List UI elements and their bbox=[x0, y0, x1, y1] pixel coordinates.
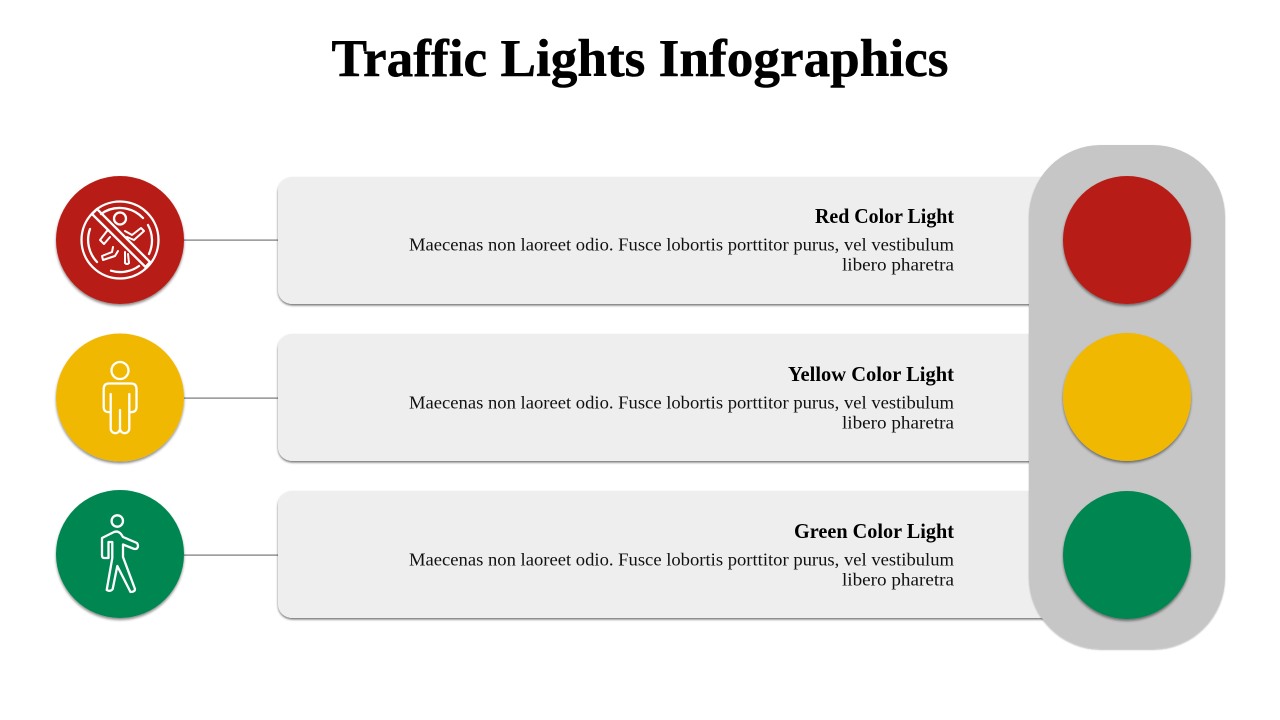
traffic light: green lamp bbox=[1063, 491, 1191, 619]
traffic light: red lamp bbox=[1063, 176, 1191, 304]
panel: green card bbox=[278, 491, 1068, 618]
text: green description bbox=[409, 550, 954, 590]
connector: green bbox=[184, 554, 279, 556]
text: yellow description: libero pharetra bbox=[842, 412, 954, 432]
icon: walking person, green circle bbox=[56, 490, 184, 618]
heading: green: Green Color Light bbox=[794, 519, 954, 543]
text: green description: libero pharetra bbox=[842, 570, 954, 590]
title: Traffic Lights Infographics bbox=[332, 30, 948, 88]
panel: yellow card bbox=[278, 334, 1068, 461]
icon: no pedestrian, red circle bbox=[56, 176, 184, 304]
text: yellow description: Maecenas non laoreet odio. Fusce lobortis porttitor purus, vel vestibulum bbox=[409, 392, 954, 412]
traffic light: yellow lamp bbox=[1063, 333, 1191, 461]
text: red description: libero pharetra bbox=[842, 254, 954, 274]
panel: red card bbox=[278, 177, 1068, 304]
text: yellow description bbox=[409, 392, 954, 432]
text: red description: Maecenas non laoreet odio. Fusce lobortis porttitor purus, vel vestibulum bbox=[409, 234, 954, 254]
text: red description bbox=[409, 234, 954, 274]
heading: yellow: Yellow Color Light bbox=[788, 362, 954, 386]
connector: yellow bbox=[184, 398, 279, 399]
text: green description: Maecenas non laoreet odio. Fusce lobortis porttitor purus, vel vestibulum bbox=[409, 550, 954, 570]
traffic light housing bbox=[1029, 145, 1225, 649]
connector: red bbox=[184, 240, 279, 241]
heading: red: Red Color Light bbox=[815, 204, 954, 228]
icon: standing person, yellow circle bbox=[56, 334, 184, 462]
